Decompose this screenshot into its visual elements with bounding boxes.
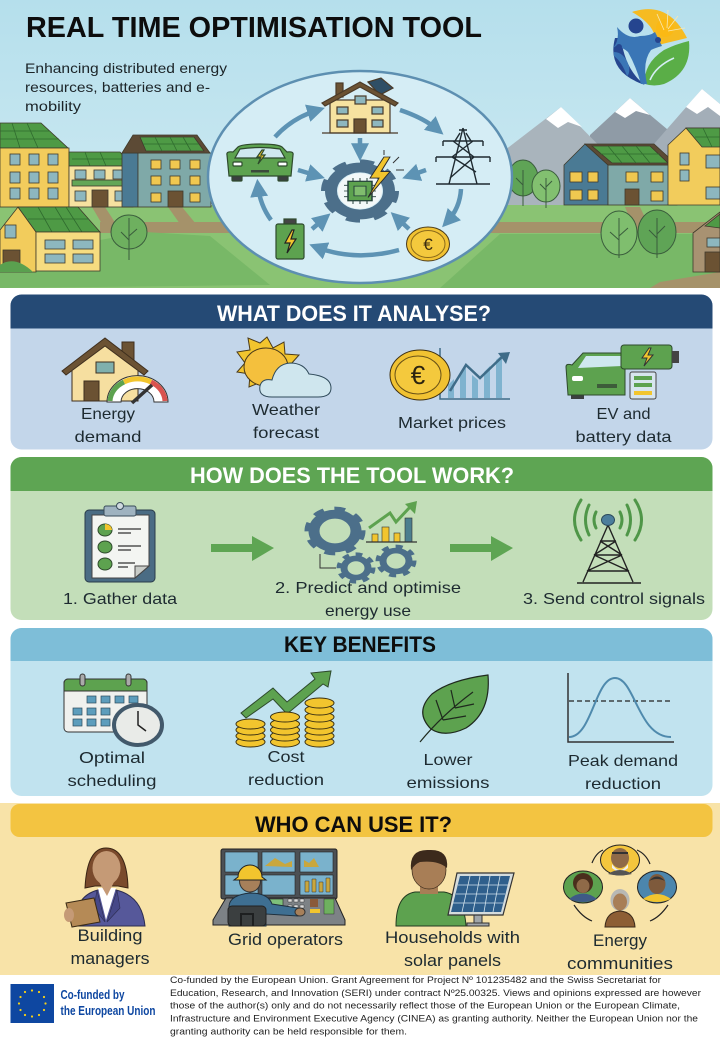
label xyxy=(385,928,520,970)
label xyxy=(68,750,156,790)
chart: peak demand xyxy=(568,673,674,742)
label xyxy=(275,580,461,620)
arrow xyxy=(211,536,274,561)
ground xyxy=(0,205,720,288)
funding disclaimer: Education, Research, and Innovation (SERI) under contract Nº25.00325. Views and opinions expressed are however xyxy=(170,988,702,999)
arrow xyxy=(450,536,513,561)
panel: key benefits xyxy=(10,628,712,796)
cycle arrows xyxy=(258,110,461,255)
label: managers xyxy=(70,949,150,968)
label xyxy=(74,406,142,446)
person top xyxy=(600,845,640,876)
heading: WHAT DOES IT ANALYSE? xyxy=(217,301,491,326)
icon: EV and battery xyxy=(566,345,679,399)
subtitle: mobility xyxy=(25,98,81,114)
car icon xyxy=(227,144,293,181)
panel: how does the tool work xyxy=(10,457,712,620)
label: reduction xyxy=(585,776,661,793)
icon: calendar and clock xyxy=(64,674,162,745)
label: scheduling xyxy=(68,773,156,790)
label xyxy=(70,926,150,968)
village left xyxy=(0,123,211,272)
trees xyxy=(111,160,676,260)
person left xyxy=(564,871,602,903)
euro coin icon: € xyxy=(423,235,433,254)
pylon icon xyxy=(436,128,490,184)
EU flag xyxy=(10,984,54,1023)
label: Building xyxy=(78,926,142,945)
funding disclaimer: Co-funded by the European Union. Grant Agreement for Project Nº 101235482 and the Swiss Secretariat for xyxy=(170,975,662,986)
icon: energy demand house xyxy=(62,338,168,403)
icon: household with solar panel xyxy=(396,850,514,926)
label: 1. Gather data xyxy=(63,591,177,608)
icon: signal tower xyxy=(574,500,642,583)
central optimisation cycle xyxy=(208,71,512,283)
label: Grid operators xyxy=(228,930,343,949)
label: Lower xyxy=(424,752,473,769)
subtitle: resources, batteries and e- xyxy=(25,79,210,95)
heading: KEY BENEFITS xyxy=(284,632,436,657)
label: Cost xyxy=(268,749,305,766)
heading: WHO CAN USE IT? xyxy=(255,812,452,837)
label: Energy xyxy=(81,406,135,423)
icon: market prices: € xyxy=(411,360,426,390)
panel: who can use it xyxy=(0,803,720,975)
label: communities xyxy=(567,954,673,973)
title: REAL TIME OPTIMISATION TOOL xyxy=(26,12,482,44)
flag caption: the European Union xyxy=(60,1004,156,1018)
icon: leaf xyxy=(420,675,488,742)
label: Peak demand xyxy=(568,753,678,770)
logo xyxy=(613,9,689,85)
mountains xyxy=(505,89,720,210)
battery icon xyxy=(276,219,304,259)
panel: what does it analyse xyxy=(10,294,712,450)
gear processor icon xyxy=(326,157,394,219)
label xyxy=(406,752,490,792)
label: EV and xyxy=(596,406,650,423)
label: demand xyxy=(74,429,142,446)
label: 2. Predict and optimise xyxy=(275,580,461,597)
person right xyxy=(638,871,676,903)
icon: gears and chart xyxy=(309,501,417,581)
label: Market prices xyxy=(398,415,506,432)
label: battery data xyxy=(576,429,672,446)
funding disclaimer: those of the author(s) only and do not necessarily reflect those of the European Union or the European Climate, xyxy=(170,1000,680,1012)
icon: grid operator xyxy=(213,849,345,926)
hero banner xyxy=(0,0,720,288)
label: reduction xyxy=(248,772,324,789)
label: Weather xyxy=(252,402,321,419)
label: Energy xyxy=(593,931,647,950)
icon: coins and rising arrow xyxy=(236,671,334,747)
label: solar panels xyxy=(404,951,501,970)
funding disclaimer: Infrastructure and Environment Executive Agency (CINEA) as granting authority. Neither the European Union nor the xyxy=(170,1014,698,1024)
person bottom xyxy=(605,889,635,927)
village right xyxy=(564,128,720,272)
icon: energy community xyxy=(564,845,676,927)
flag caption xyxy=(60,988,156,1018)
icon: market prices xyxy=(390,348,510,400)
subtitle xyxy=(25,60,227,114)
label: forecast xyxy=(253,425,320,442)
icon: clipboard xyxy=(85,502,155,582)
label xyxy=(252,402,321,442)
label xyxy=(248,749,324,789)
label: emissions xyxy=(406,775,490,792)
subtitle: Enhancing distributed energy xyxy=(25,60,227,76)
icon: weather forecast xyxy=(237,337,331,397)
funding disclaimer: granting authority can be held responsible for them. xyxy=(170,1026,407,1038)
label xyxy=(568,753,678,793)
label: Optimal xyxy=(79,750,145,767)
funding disclaimer xyxy=(170,975,702,1038)
euro coin icon xyxy=(406,227,450,261)
label: Households with xyxy=(385,928,520,947)
label: 3. Send control signals xyxy=(523,591,705,608)
label xyxy=(567,931,673,973)
heading: HOW DOES THE TOOL WORK? xyxy=(190,463,514,488)
house icon xyxy=(322,78,398,133)
EU co-funded logo xyxy=(10,984,156,1023)
label xyxy=(576,406,672,446)
flag caption: Co-funded by xyxy=(60,988,125,1002)
label: energy use xyxy=(325,603,411,620)
icon: building manager xyxy=(64,848,145,927)
